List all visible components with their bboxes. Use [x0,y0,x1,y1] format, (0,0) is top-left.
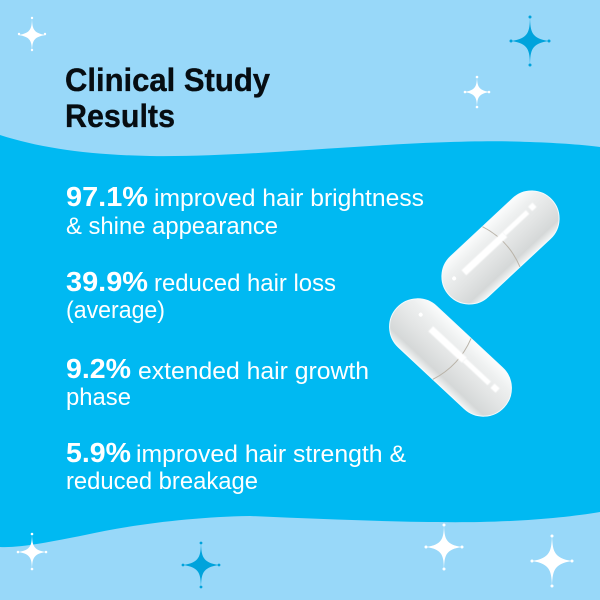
capsule: lower [378,287,523,428]
sparkle: bottom right 2 [530,534,574,588]
title [65,62,270,134]
sparkle: bottom left [17,533,47,570]
stat: strength [66,437,406,495]
title: Clinical Study [65,62,270,98]
stat: hair loss: 39.9% [66,266,148,297]
sparkle: top right blue [510,16,550,66]
sparkle: bottom centre blue [182,542,220,588]
sparkle: top right white [464,76,490,108]
sparkle: top left [18,17,46,52]
stat: hair loss: (average) [66,297,165,324]
stat: growth phase [66,353,369,411]
title: Results [65,98,175,134]
stat: brightness: 97.1% [66,181,148,212]
stat: strength: reduced breakage [66,468,258,495]
stat: brightness [66,181,424,240]
capsule: upper [431,180,570,315]
sparkle: bottom right 1 [424,524,464,570]
stat: strength: 5.9% [66,437,131,468]
stat: growth phase: 9.2% [66,353,131,384]
stat: hair loss [66,266,336,324]
stat: hair loss: reduced hair loss [154,270,336,297]
stat: strength: improved hair strength & [136,441,406,468]
stat: brightness: improved hair brightness [154,185,424,212]
stat: growth phase: extended hair growth [138,358,369,385]
stat: brightness: & shine appearance [66,213,278,240]
stat: growth phase: phase [66,384,131,411]
wavy blue content band [0,135,600,547]
